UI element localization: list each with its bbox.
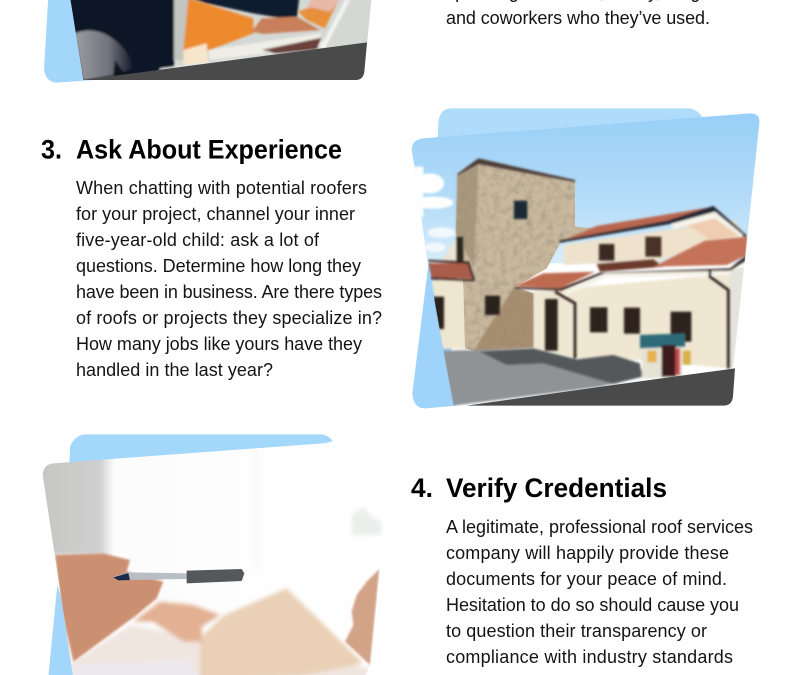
text: step 4 body: compliance with industry standards [446, 647, 733, 667]
right hand [345, 569, 379, 665]
play house [642, 345, 682, 378]
clouds [416, 173, 444, 193]
text: step 3 body [76, 178, 382, 380]
text: step 3 body: for your project, channel your inner [76, 204, 355, 224]
heading: step 3: 3. [41, 134, 62, 164]
ground [442, 348, 643, 406]
text: step 3 body: of roofs or projects they specialize in? [76, 308, 382, 328]
text: step 4 body [446, 517, 753, 667]
heading: step 3: Ask About Experience [76, 134, 342, 164]
text: step 3 body: handled in the last year? [76, 360, 273, 380]
text: step 4 body: to question their transparency or [446, 621, 707, 641]
text: step 3 body: When chatting with potential roofers [76, 178, 367, 198]
grey banner wedge [467, 368, 735, 406]
heading: step 4: 4. [411, 473, 433, 503]
text: step 3 body: questions. Determine how long they [76, 256, 361, 276]
tower [456, 163, 593, 351]
white trim [563, 271, 730, 295]
lower hand [133, 602, 220, 642]
text: step 4 body: company will happily provide these [446, 543, 729, 563]
pen [113, 572, 187, 580]
table [70, 625, 370, 675]
top text fragment: and coworkers who they’ve used. [446, 8, 710, 28]
heading: step 4: Verify Credentials [446, 473, 667, 503]
photo: stone house with terracotta roof [400, 108, 767, 408]
document [200, 588, 363, 675]
text: step 3 body: How many jobs like yours have they [76, 334, 362, 354]
roofs [428, 263, 473, 278]
grey banner wedge [83, 42, 367, 80]
walls [432, 280, 473, 348]
text: step 4 body: Hesitation to do so should cause you [446, 595, 739, 615]
text: step 3 body: have been in business. Are there types [76, 282, 382, 302]
photo: team at laptop [44, 0, 377, 83]
gutters [555, 270, 728, 368]
text: step 4 body: A legitimate, professional roof services [446, 517, 753, 537]
photo: handing over a pen and document [40, 434, 393, 675]
text: step 4 body: documents for your peace of mind. [446, 569, 727, 589]
text: step 3 body: five-year-old child: ask a lot of [76, 230, 320, 250]
top text fragment [446, 0, 746, 28]
windows [514, 201, 527, 219]
main hand [55, 553, 163, 662]
